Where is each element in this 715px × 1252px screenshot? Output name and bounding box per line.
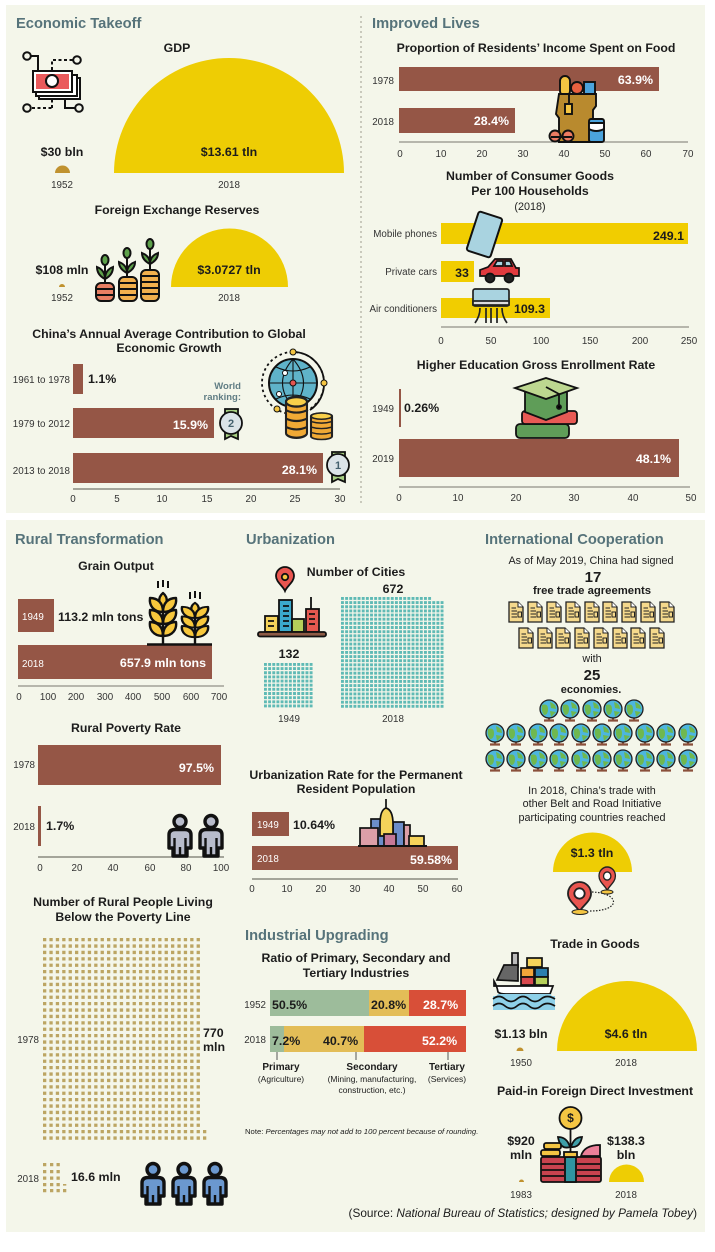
- icon: city with pin: [258, 567, 326, 636]
- dot chart: rural poor: [17, 940, 225, 1192]
- icon: coin flower on box: [541, 1107, 601, 1182]
- bar chart: consumer goods: 100: [533, 336, 550, 347]
- dot chart: rural poor: 770: [203, 1026, 224, 1040]
- bar chart: rural poverty: 0: [37, 863, 43, 874]
- bar chart: food spending: 63.9%: [618, 73, 653, 87]
- stacked bars: industries: 50.5%: [272, 998, 307, 1012]
- bar chart: contribution to global growth: 2013 to 2018: [13, 466, 71, 477]
- bar chart: food spending: 40: [559, 149, 570, 160]
- text: belt and road trade: In 2018, China’s trade with: [528, 785, 656, 797]
- icon: car: [480, 259, 519, 282]
- title: Foreign Exchange Reserves: Foreign Exchange Reserves: [95, 203, 260, 217]
- title: consumer goods: [446, 169, 614, 213]
- bar chart: rural poverty: 2018: [13, 822, 36, 833]
- bar chart: consumer goods: Mobile phones: [373, 229, 437, 240]
- legend: industry types: (Agriculture): [258, 1074, 304, 1084]
- title: Grain Output: Grain Output: [78, 559, 154, 573]
- icon: medal 1: [327, 452, 349, 482]
- chart: FDI semicircles: bln: [617, 1148, 635, 1162]
- bar chart: rural poverty: 100: [213, 863, 230, 874]
- bar chart: grain output: 400: [125, 692, 142, 703]
- heading: Urbanization: Urbanization: [246, 532, 335, 548]
- title: China's contribution: [32, 327, 306, 355]
- bar chart: contribution to global growth: 1979 to 2012: [13, 419, 70, 430]
- icon: grocery bag: [550, 76, 604, 142]
- icon: grey people: [169, 816, 222, 856]
- bar chart: food spending: 60: [641, 149, 652, 160]
- stacked bars: industries: 2018: [244, 1035, 267, 1046]
- bar chart: enrollment: 0: [396, 493, 402, 504]
- legend: industry types: Tertiary: [429, 1062, 465, 1073]
- icon: skyline: [358, 799, 427, 846]
- title: Number of Cities: Number of Cities: [307, 565, 405, 579]
- panel: Improved Lives: [369, 16, 698, 504]
- title: consumer goods: Per 100 Households: [471, 184, 589, 198]
- text: economies: with: [581, 653, 602, 665]
- bar chart: enrollment: 0.26%: [404, 401, 439, 415]
- title: people below poverty line: Number of Rural People Living: [33, 895, 213, 909]
- bar chart: rural poverty: 1.7%: [46, 819, 74, 833]
- bar chart: consumer goods: 50: [486, 336, 497, 347]
- title: consumer goods: Number of Consumer Goods: [446, 169, 614, 183]
- bar chart: contribution to global growth: 20: [246, 494, 257, 505]
- heading: International Cooperation: International Cooperation: [485, 532, 664, 548]
- bar chart: rural poverty: [13, 745, 230, 874]
- bar chart: contribution to global growth: 30: [335, 494, 346, 505]
- bar chart: consumer goods: 249.1: [653, 229, 684, 243]
- bar chart: rural poverty: 60: [145, 863, 156, 874]
- bar chart: consumer goods: 33: [455, 266, 469, 280]
- title: urbanization rate: Resident Population: [297, 782, 415, 796]
- bar chart: contribution to global growth: 1961 to 1978: [13, 375, 71, 386]
- chart: GDP semicircles: [41, 58, 344, 191]
- stacked bars: industries: 28.7%: [423, 998, 458, 1012]
- bar chart: grain output: 113.2 mln tons: [58, 610, 143, 624]
- chart: trade in goods semicircles: $1.13 bln: [494, 1027, 548, 1041]
- bar chart: consumer goods: 250: [681, 336, 698, 347]
- title: ratio of industries: Ratio of Primary, Secondary and: [261, 951, 451, 965]
- icons: 17 documents: [509, 602, 674, 648]
- bar chart: contribution to global growth: [13, 364, 346, 505]
- label: World ranking: ranking:: [204, 392, 241, 403]
- dot chart: cities: 672: [383, 582, 403, 596]
- bar chart: urbanization rate: 2018: [257, 854, 279, 865]
- bar chart: urbanization rate: 59.58%: [410, 853, 452, 867]
- bar chart: urbanization rate: [249, 812, 463, 895]
- icon: graduation cap on books: [515, 378, 577, 438]
- bar chart: contribution to global growth: 25: [290, 494, 301, 505]
- dot chart: cities: 1949: [278, 714, 300, 725]
- bar chart: food spending: 10: [436, 149, 447, 160]
- icon: map pins: [568, 867, 615, 914]
- chart: FDI semicircles: 2018: [615, 1190, 637, 1201]
- bar chart: food spending: 1978: [372, 76, 395, 87]
- bar chart: enrollment: 40: [628, 493, 639, 504]
- heading: Industrial Upgrading: Industrial Upgrading: [245, 928, 389, 944]
- panel: Rural Transformation: [13, 532, 230, 1204]
- bar chart: rural poverty: 40: [108, 863, 119, 874]
- bar chart: food spending: 2018: [372, 117, 395, 128]
- title: consumer goods: (2018): [514, 201, 546, 213]
- label: World ranking: World: [214, 381, 241, 392]
- dot chart: rural poor: 16.6 mln: [71, 1170, 121, 1184]
- bar chart: food spending: 30: [518, 149, 529, 160]
- chart: GDP semicircles: $30 bln: [41, 145, 83, 159]
- stacked bars: industries: 52.2%: [422, 1034, 457, 1048]
- bar chart: contribution to global growth: 15: [202, 494, 213, 505]
- bar chart: consumer goods: [369, 223, 698, 347]
- bar chart: urbanization rate: 10: [282, 884, 293, 895]
- icon: coin flower on box: $: [567, 1111, 574, 1125]
- bar chart: urbanization rate: 50: [418, 884, 429, 895]
- bar chart: urbanization rate: 60: [452, 884, 463, 895]
- bar chart: urbanization rate: 1949: [257, 820, 279, 831]
- bar chart: contribution to global growth: 0: [70, 494, 76, 505]
- chart: FDI semicircles: 1983: [510, 1190, 532, 1201]
- bar chart: food spending: 20: [477, 149, 488, 160]
- icon: wheat: [147, 580, 212, 644]
- chart: reserves semicircles: 1952: [51, 293, 73, 304]
- bar chart: contribution to global growth: 1.1%: [88, 372, 116, 386]
- chart: reserves semicircles: $3.0727 tln: [197, 263, 261, 277]
- title: people below poverty line: Below the Poverty Line: [55, 910, 191, 924]
- panel: Industrial Upgrading: [244, 928, 478, 1136]
- dot chart: cities: 2018: [382, 714, 404, 725]
- heading: Improved Lives: Improved Lives: [372, 16, 480, 32]
- stacked bars: industries: 1952: [244, 1000, 266, 1011]
- title: Paid-in FDI: Paid-in Foreign Direct Investment: [497, 1084, 693, 1098]
- title: higher education: Higher Education Gross Enrollment Rate: [417, 358, 655, 372]
- title: income spent on food: Proportion of Residents’ Income Spent on Food: [397, 41, 675, 55]
- heading: Rural Transformation: Rural Transformation: [15, 532, 164, 548]
- icon: medal 2: [220, 409, 242, 439]
- bar chart: urbanization rate: 0: [249, 884, 255, 895]
- bar chart: enrollment: 2019: [372, 454, 394, 465]
- icons: 25 globes: [486, 700, 697, 770]
- bar chart: contribution to global growth: 28.1%: [282, 463, 317, 477]
- bar chart: consumer goods: 109.3: [514, 302, 545, 316]
- bar chart: consumer goods: Private cars: [385, 267, 437, 278]
- title: China's contribution: China’s Annual Average Contribution to Global: [32, 327, 306, 341]
- bar chart: consumer goods: 0: [438, 336, 444, 347]
- title: Rural Poverty Rate: Rural Poverty Rate: [71, 721, 181, 735]
- bar chart: urbanization rate: 20: [316, 884, 327, 895]
- heading: Economic Takeoff: Economic Takeoff: [16, 16, 142, 32]
- title: GDP: GDP: [164, 41, 190, 55]
- panel: International Cooperation: [485, 532, 697, 1201]
- bar chart: grain output: 600: [183, 692, 200, 703]
- note: Note: Percentages may not add to 100 percent because of rounding.: [245, 1127, 478, 1136]
- text: agreements: free trade agreements: [533, 585, 651, 597]
- legend: industry types: Primary: [262, 1062, 300, 1073]
- title: urbanization rate: Urbanization Rate for the Permanent: [249, 768, 463, 782]
- bar chart: grain output: 657.9 mln tons: [120, 656, 206, 670]
- chart: reserves semicircles: 2018: [218, 293, 240, 304]
- icon: blue people: [142, 1164, 226, 1204]
- title: urbanization rate: [249, 768, 463, 796]
- bar chart: urbanization rate: 40: [384, 884, 395, 895]
- panel: bottom background: [6, 520, 705, 1232]
- bar chart: consumer goods: Air conditioners: [369, 304, 437, 315]
- bar chart: urbanization rate: 10.64%: [293, 818, 335, 832]
- icon: plants on coin stacks: [96, 239, 159, 301]
- bar chart: enrollment: 50: [686, 493, 697, 504]
- chart: trade in goods semicircles: $4.6 tln: [605, 1027, 647, 1041]
- chart: FDI semicircles: mln: [510, 1148, 532, 1162]
- chart: trade in goods semicircles: 1950: [510, 1058, 532, 1069]
- chart: trade in goods semicircles: [494, 981, 697, 1069]
- semicircle: belt and road value: [553, 833, 632, 872]
- bar chart: enrollment: 30: [569, 493, 580, 504]
- text: economies: 25: [584, 667, 600, 684]
- dot chart: cities: [264, 582, 445, 725]
- panel: Economic Takeoff: [13, 16, 349, 505]
- legend: industry types: (Mining, manufacturing,: [328, 1074, 416, 1084]
- stacked bars: industries: [244, 990, 466, 1060]
- icon: medal 2: 2: [228, 418, 234, 430]
- bar chart: enrollment: 10: [453, 493, 464, 504]
- bar chart: contribution to global growth: 15.9%: [173, 418, 208, 432]
- dot chart: rural poor: mln: [203, 1040, 225, 1054]
- text: agreements: As of May 2019, China had signed: [508, 555, 674, 567]
- bar chart: consumer goods: 200: [632, 336, 649, 347]
- chart: FDI semicircles: $138.3: [607, 1134, 645, 1148]
- text: belt and road trade: participating countries reached: [518, 812, 666, 824]
- bar chart: enrollment: 48.1%: [636, 452, 671, 466]
- chart: GDP semicircles: 1952: [51, 180, 73, 191]
- stacked bars: industries: 40.7%: [323, 1034, 358, 1048]
- bar chart: contribution to global growth: 5: [114, 494, 120, 505]
- bar chart: grain output: [16, 599, 228, 703]
- bar chart: grain output: 2018: [22, 659, 44, 670]
- bar chart: food spending: 70: [683, 149, 694, 160]
- icon: cargo ship: [493, 953, 555, 1010]
- bar chart: grain output: 200: [68, 692, 85, 703]
- panel: Urbanization: [246, 532, 463, 895]
- bar chart: urbanization rate: 30: [350, 884, 361, 895]
- bar chart: grain output: 1949: [22, 612, 44, 623]
- icon: phone: [466, 211, 503, 258]
- dot chart: cities: 132: [279, 647, 299, 661]
- chart: reserves semicircles: $108 mln: [35, 263, 89, 277]
- bar chart: enrollment: 20: [511, 493, 522, 504]
- bar chart: rural poverty: 80: [181, 863, 192, 874]
- title: ratio of industries: [261, 951, 451, 980]
- bar chart: grain output: 0: [16, 692, 22, 703]
- text: economies: economies.: [561, 684, 621, 696]
- bar chart: enrollment: [372, 389, 697, 504]
- chart: GDP semicircles: $13.61 tln: [201, 145, 257, 159]
- chart: trade in goods semicircles: 2018: [615, 1058, 637, 1069]
- bar chart: rural poverty: 20: [72, 863, 83, 874]
- text: belt and road trade: other Belt and Road Initiative: [523, 798, 661, 810]
- bar chart: grain output: 300: [97, 692, 114, 703]
- dot chart: rural poor: 1978: [17, 1035, 40, 1046]
- stacked bars: industries: 20.8%: [371, 998, 406, 1012]
- stacked bars: industries: 7.2%: [272, 1034, 300, 1048]
- text: agreements: 17: [585, 569, 601, 586]
- legend: industry types: construction, etc.): [338, 1085, 406, 1095]
- semicircle: belt and road value: $1.3 tln: [571, 846, 613, 860]
- bar chart: rural poverty: 97.5%: [179, 761, 214, 775]
- chart: FDI semicircles: [507, 1134, 645, 1201]
- icon: air conditioner: [473, 289, 509, 323]
- text: economies: [561, 653, 621, 696]
- icon: money network: [23, 52, 83, 112]
- label: World ranking: [204, 381, 241, 403]
- title: ratio of industries: Tertiary Industries: [303, 966, 409, 980]
- text: belt and road trade: [518, 785, 666, 824]
- icon: globe with coins: [262, 349, 332, 440]
- dot chart: rural poor: 2018: [17, 1174, 40, 1185]
- panel: top background: [6, 5, 705, 513]
- bar chart: enrollment: 1949: [372, 404, 394, 415]
- bar chart: food spending: 50: [600, 149, 611, 160]
- chart: GDP semicircles: 2018: [218, 180, 240, 191]
- text: agreements: [508, 555, 674, 597]
- title: China's contribution: Economic Growth: [116, 341, 222, 355]
- bar chart: grain output: 700: [211, 692, 228, 703]
- bar chart: grain output: 500: [154, 692, 171, 703]
- title: Trade in Goods: Trade in Goods: [550, 937, 640, 951]
- icon: medal 1: 1: [335, 460, 341, 472]
- title: people below poverty line: [33, 895, 213, 924]
- source line: (Source: National Bureau of Statistics; designed by Pamela Tobey): [349, 1206, 697, 1220]
- bar chart: food spending: [372, 67, 694, 160]
- chart: FDI semicircles: $920: [507, 1134, 535, 1148]
- bar chart: food spending: 0: [397, 149, 403, 160]
- bar chart: rural poverty: 1978: [13, 760, 36, 771]
- bar chart: consumer goods: 150: [582, 336, 599, 347]
- chart: reserves semicircles: [35, 228, 288, 304]
- legend: industry types: Secondary: [346, 1062, 398, 1073]
- legend: industry types: [258, 1062, 466, 1095]
- bar chart: grain output: 100: [40, 692, 57, 703]
- bar chart: contribution to global growth: 10: [157, 494, 168, 505]
- bar chart: food spending: 28.4%: [474, 114, 509, 128]
- legend: industry types: (Services): [428, 1074, 466, 1084]
